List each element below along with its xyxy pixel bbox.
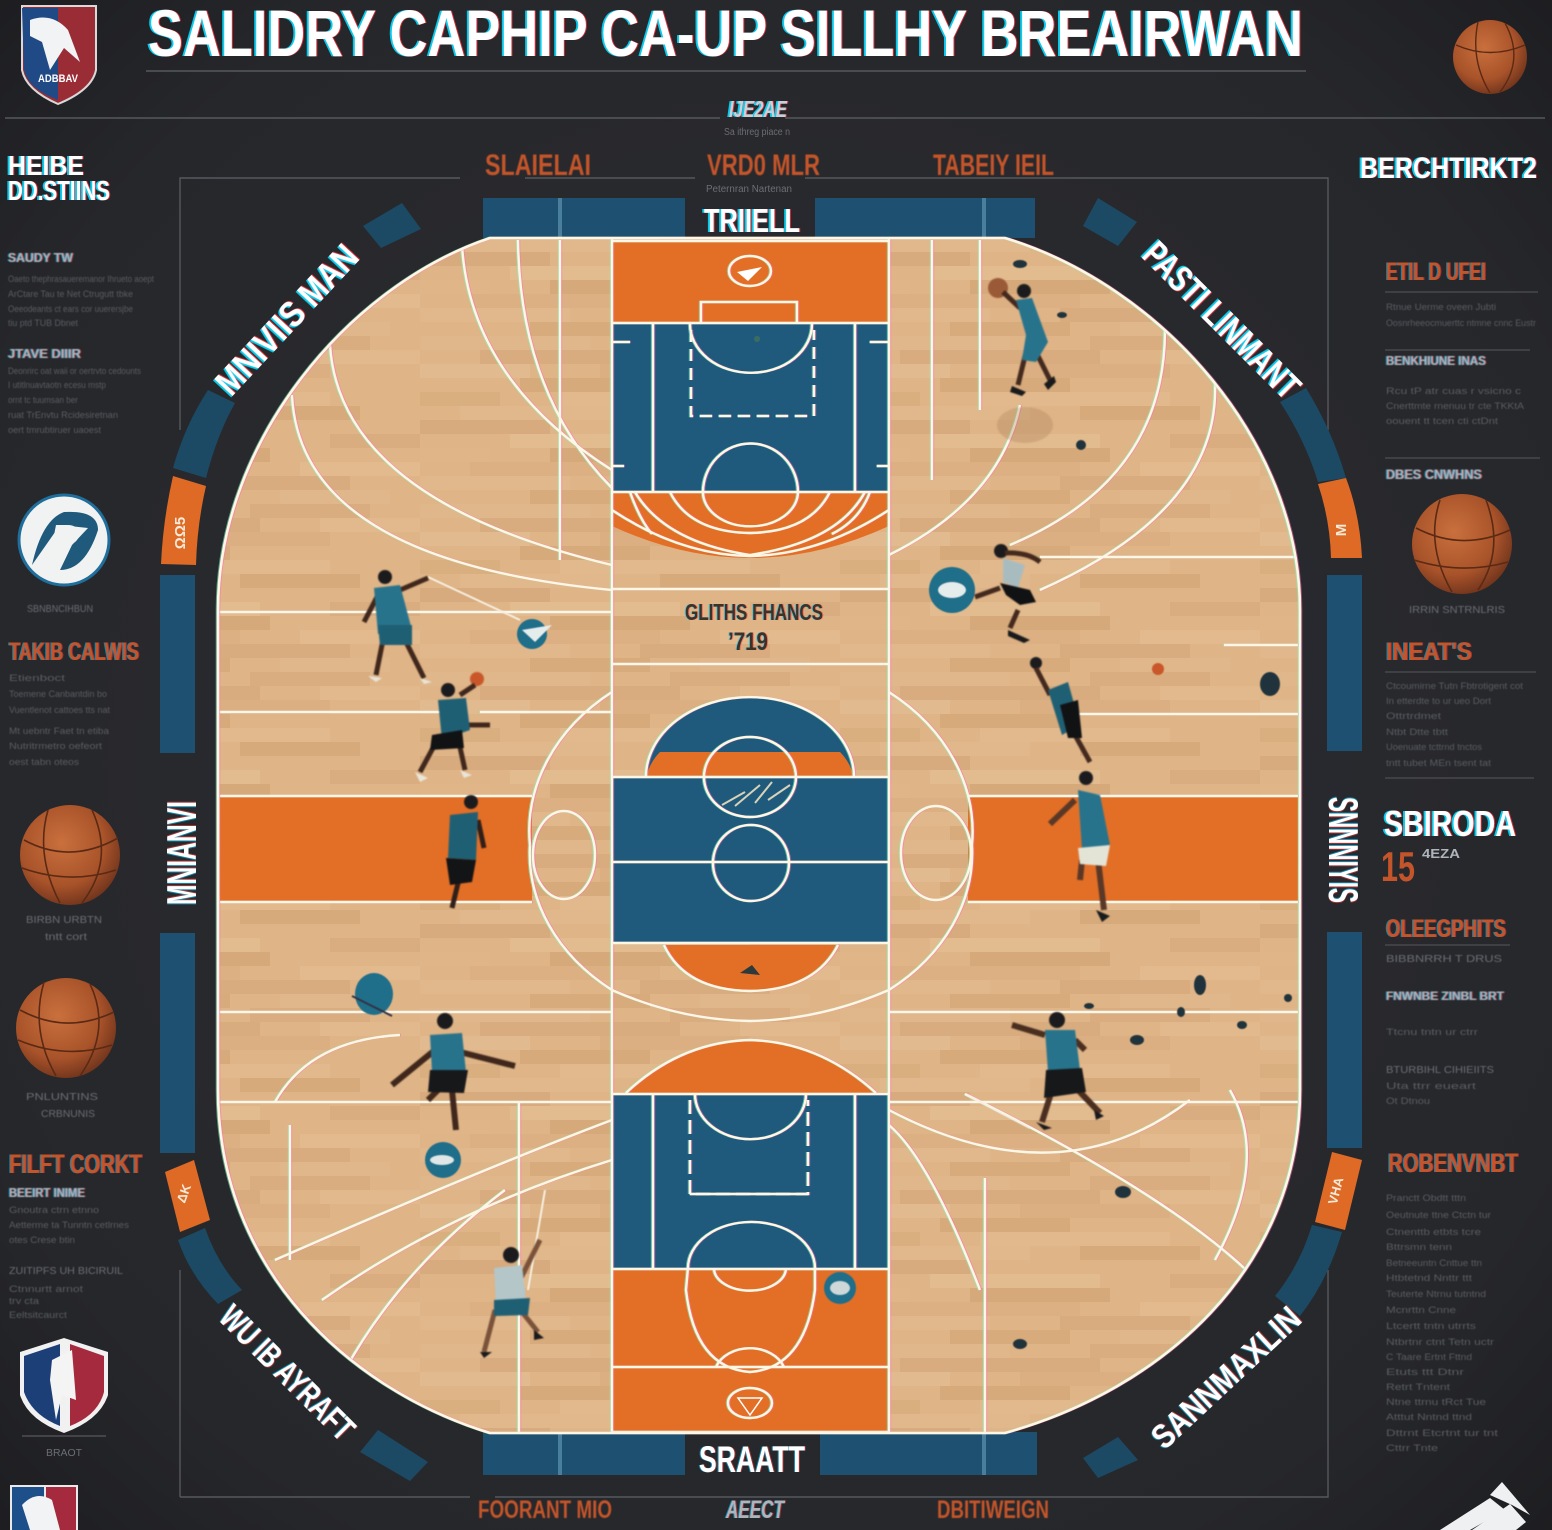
outer ring segments (160, 198, 1362, 1481)
player 2 (975, 544, 1040, 643)
logo: league shield top left (22, 6, 96, 104)
sub heading centre top (724, 96, 790, 138)
curved label bottom right: SANNMAXLIN (1144, 1299, 1309, 1457)
text block: second (8, 346, 141, 435)
text lines: Ctnnurtt arnot (9, 1284, 84, 1294)
heading: filet court: FILFT CORKT (9, 1149, 142, 1179)
text lines: Teuterte Ntrnu tutntnd (1386, 1289, 1486, 1299)
panel: left top text (8, 150, 154, 435)
text lines: Dttrnt Etcrtnt tur tnt (1386, 1428, 1499, 1438)
panel: right top (1360, 152, 1540, 482)
text lines: Ctcoumirne Tutn Fbtrotigent cot (1386, 681, 1524, 691)
text lines: Ntne ttrnu tRct Tue (1386, 1397, 1486, 1407)
panel: right clegphits (1385, 915, 1510, 1106)
stat: sbirodaa: SBIRODA (1384, 803, 1516, 844)
text lines: DBES CNWHNS (1386, 466, 1482, 482)
text lines (1386, 1193, 1499, 1453)
player 7 (415, 672, 490, 782)
logo: peak bottom right (1440, 1482, 1530, 1530)
players (364, 278, 1110, 1358)
text lines: Toemene Canbantdin bo (9, 689, 107, 699)
text block: second: Deonrirc oat waii or oertrvto cedounts (8, 366, 141, 376)
caption shield: BRAOT (46, 1448, 82, 1459)
curved label bottom left: WU IB AYRAFT (211, 1298, 362, 1449)
text block: salary (8, 250, 154, 328)
heading: ineart: INEAT'S (1386, 638, 1472, 666)
footer heading: centre: AEECT (725, 1496, 786, 1524)
outer ring segments: M (1333, 524, 1350, 536)
caption basketball lower: CRBNUNIS (41, 1109, 95, 1120)
centre score text: GLITHS FHANCS (685, 599, 823, 625)
heading: left: HEIBE (8, 150, 84, 181)
column heading: centre: Peternran Nartenan (706, 184, 792, 195)
loose debris (1013, 260, 1292, 1349)
text lines: Ctnenttb etbts tcre (1386, 1227, 1481, 1237)
text lines: Nutritrmetro oefeort (9, 741, 103, 751)
logo: shield left bottom (20, 1338, 108, 1433)
text lines: Uoenuate tcttrnd tnctos (1386, 742, 1483, 752)
caption basketball lower: PNLUNTINS (26, 1092, 98, 1103)
heading: left: DD.STIINS (8, 175, 110, 206)
text lines: Etuts ttt Dtnr (1386, 1367, 1464, 1377)
side label left: MNIANVI (158, 801, 205, 905)
text lines: BIBBNRRH T DRUS (1386, 954, 1502, 965)
stat: sbirodaa: 4EZA (1422, 846, 1461, 861)
icon: basketball left lower (16, 978, 116, 1078)
court floor (218, 238, 1300, 1433)
player 6 (364, 570, 432, 684)
panel: right insights (1385, 638, 1536, 778)
heading: clegphits: OLEEGPHITS (1386, 915, 1506, 943)
player 8 (446, 795, 484, 908)
caption basketball lower (26, 1092, 98, 1120)
text block: salary: SAUDY TW (8, 250, 74, 265)
player 10 (480, 1240, 544, 1358)
banner: bottom sraatt: SRAATT (699, 1439, 805, 1480)
text lines: Ntbt Dtte tbtt (1386, 727, 1449, 737)
text block: second: JTAVE DIIIR (8, 346, 82, 361)
icon: basketball right (1412, 494, 1512, 594)
text lines: Eeltsitcaurct (9, 1310, 68, 1320)
column heading: left: SLAIELAI (485, 149, 591, 182)
text lines: BENKHIUNE INAS (1386, 353, 1486, 368)
caption shield (22, 1436, 106, 1459)
text lines: Uta ttrr eueart (1386, 1081, 1477, 1091)
text lines (1386, 681, 1524, 768)
text lines: oouent tt tcen cti ctDnt (1386, 416, 1499, 426)
text lines: Rtnue Uerme oveen Jubti (1386, 302, 1496, 312)
disc bottom (824, 1272, 856, 1304)
text lines: Atttut Nntnd ttnd (1386, 1412, 1472, 1422)
player 4 (1050, 771, 1110, 922)
text lines: Rcu tP atr cuas r vsicno c (1386, 386, 1522, 396)
text lines: Betneeuntn Cnttue ttn (1386, 1258, 1482, 1268)
icon: basketball left middle (20, 805, 120, 905)
text lines: Aetterme ta Tunntn cetlrnes (9, 1220, 130, 1230)
text lines: trv cta (9, 1296, 39, 1306)
text block: second: oert tmrubtiruer uaoest (8, 425, 102, 435)
text lines: Ot Dtnou (1386, 1096, 1430, 1106)
text lines: oest tabn oteos (9, 757, 80, 767)
text block: second: ornt tc tuumsan ber (8, 395, 78, 405)
outer ring segments: ΔK (174, 1182, 194, 1205)
pass line (428, 577, 1030, 1290)
text lines (1386, 954, 1505, 1106)
text lines: Ttcnu tntn ur ctrr (1386, 1027, 1478, 1037)
icon: basketball top right (1453, 20, 1527, 94)
player 1 (988, 278, 1056, 443)
logo: round emblem left: P (49, 516, 79, 565)
court emblems (722, 267, 790, 1415)
disc right upper (929, 567, 975, 613)
outer ring segments: VHA (1325, 1175, 1347, 1206)
logo: league shield top left: ADBBAV (38, 73, 79, 85)
banner: top trnell: TRIIELL (704, 202, 800, 239)
disc left upper (517, 619, 552, 649)
column heading: right: TABEIY IEIL (933, 149, 1054, 182)
centre score text (685, 599, 823, 656)
text lines: Vuentlenot cattoes tts nat (9, 705, 110, 715)
sub heading centre top: Sa ithreg piace n (724, 127, 790, 138)
text lines: Oeutnute ttne Ctctn tur (1386, 1210, 1491, 1220)
text block: salary: Oaeto thephrasaueremanor Ihrueto aoept (8, 274, 154, 284)
text block: second: I utitlnuavtaotn ecesu mstp (8, 380, 106, 390)
discs and loose objects (352, 260, 1292, 1349)
court coloured zones (220, 241, 1298, 1433)
side label right: SNNNIYIS (1320, 797, 1367, 903)
curved label top left: MNIVIIS MAN (207, 236, 367, 403)
text lines (9, 673, 110, 767)
player 9 (392, 1013, 515, 1130)
text lines: BTURBIHL CIHIEIITS (1386, 1065, 1494, 1076)
text lines: In etterdte to ur ueo Dort (1386, 696, 1492, 706)
text lines: tntt tubet MEn tsent tat (1386, 758, 1492, 768)
panel: left taxes block (9, 638, 139, 767)
text lines: Bttrsmn tenn (1386, 1242, 1452, 1252)
text lines: Ntbrtnr ctnt Tetn uctr (1386, 1337, 1494, 1347)
basketball court (218, 238, 1300, 1433)
caption basketball: tntt cort (45, 932, 87, 943)
disc left lower (425, 1142, 461, 1178)
text block: salary: Oeeodeants ct ears cor uuerersjbe (8, 304, 133, 314)
caption basketball: BIRBN URBTN (26, 915, 102, 926)
text lines: Ottrtrdmet (1386, 711, 1442, 721)
text lines: otes Crese btin (9, 1235, 75, 1245)
text block: second: ruat TrEnvtu Rcidesiretnan (8, 410, 118, 420)
text lines: ZUITIPFS UH BICIRUIL (9, 1266, 123, 1277)
column heading: centre: VRD0 MLR (707, 149, 820, 182)
stat: sbirodaa (1381, 803, 1516, 890)
text lines: C Taare Ertnt Fttnd (1386, 1352, 1472, 1362)
heading: etl: ETIL D UFEI (1386, 258, 1486, 286)
curved label top right: PASTI LINMANT (1135, 233, 1309, 407)
text lines: Ltcertt tntn utrrts (1386, 1321, 1477, 1331)
caption basketball right: IRRIN SNTRNLRIS (1409, 605, 1505, 616)
caption round emblem: SBNBNCIHBUN (27, 604, 93, 615)
text lines: Gnoutra ctrn etnno (9, 1205, 99, 1215)
panel: left filet court block (9, 1149, 142, 1320)
text lines: Htbtetnd Nnttr ttt (1386, 1273, 1473, 1283)
text lines: Retrt Tntent (1386, 1382, 1451, 1392)
outer ring segments: ΩΩ5 (172, 517, 189, 549)
centre score text: ’719 (728, 628, 768, 656)
stat: sbirodaa: 15 (1381, 843, 1415, 890)
court outline (218, 238, 1300, 1433)
text lines: Cttrr Tnte (1386, 1443, 1438, 1453)
text lines: Oosnrheeocmuerttc ntmne cnnc Eustr (1386, 318, 1536, 328)
text lines: Etienboct (9, 673, 66, 683)
column heading: centre (706, 149, 820, 195)
caption basketball (26, 915, 102, 943)
logo: league shield bottom left (10, 1485, 78, 1530)
disc blob left (352, 973, 393, 1016)
text lines: Mt uebntr Faet tn etiba (9, 726, 109, 736)
text lines: Pranctt Obdtt tttn (1386, 1193, 1466, 1203)
text lines: Mcnrttn Cnne (1386, 1305, 1456, 1315)
panel: right robenvnbt (1386, 1148, 1518, 1453)
text lines: BEEIRT INIME (9, 1185, 85, 1200)
loose ball (1152, 663, 1164, 675)
player 3 (1030, 657, 1090, 762)
text block: salary: ArCtare Tau te Net Ctrugutt tbke (8, 289, 133, 299)
heading: takes calwis: TAKIB CALWIS (9, 638, 139, 666)
logo: round emblem left (19, 495, 109, 585)
text lines: FNWNBE ZINBL BRT (1386, 989, 1505, 1003)
sub heading centre top: IJE2AE (729, 96, 787, 122)
text lines (1386, 302, 1536, 482)
text lines (9, 1185, 130, 1320)
footer heading: left: FOORANT MIO (478, 1496, 612, 1524)
heading: left (8, 150, 110, 206)
text lines: Cnerttmte rnenuu tr cte TKKtA (1386, 401, 1524, 411)
court lines (220, 238, 1298, 1433)
footer heading: right: DBITIWEIGN (937, 1496, 1049, 1524)
player 5 (1012, 1012, 1104, 1130)
text block: salary: tiu ptd TUB Dbnet (8, 318, 78, 328)
